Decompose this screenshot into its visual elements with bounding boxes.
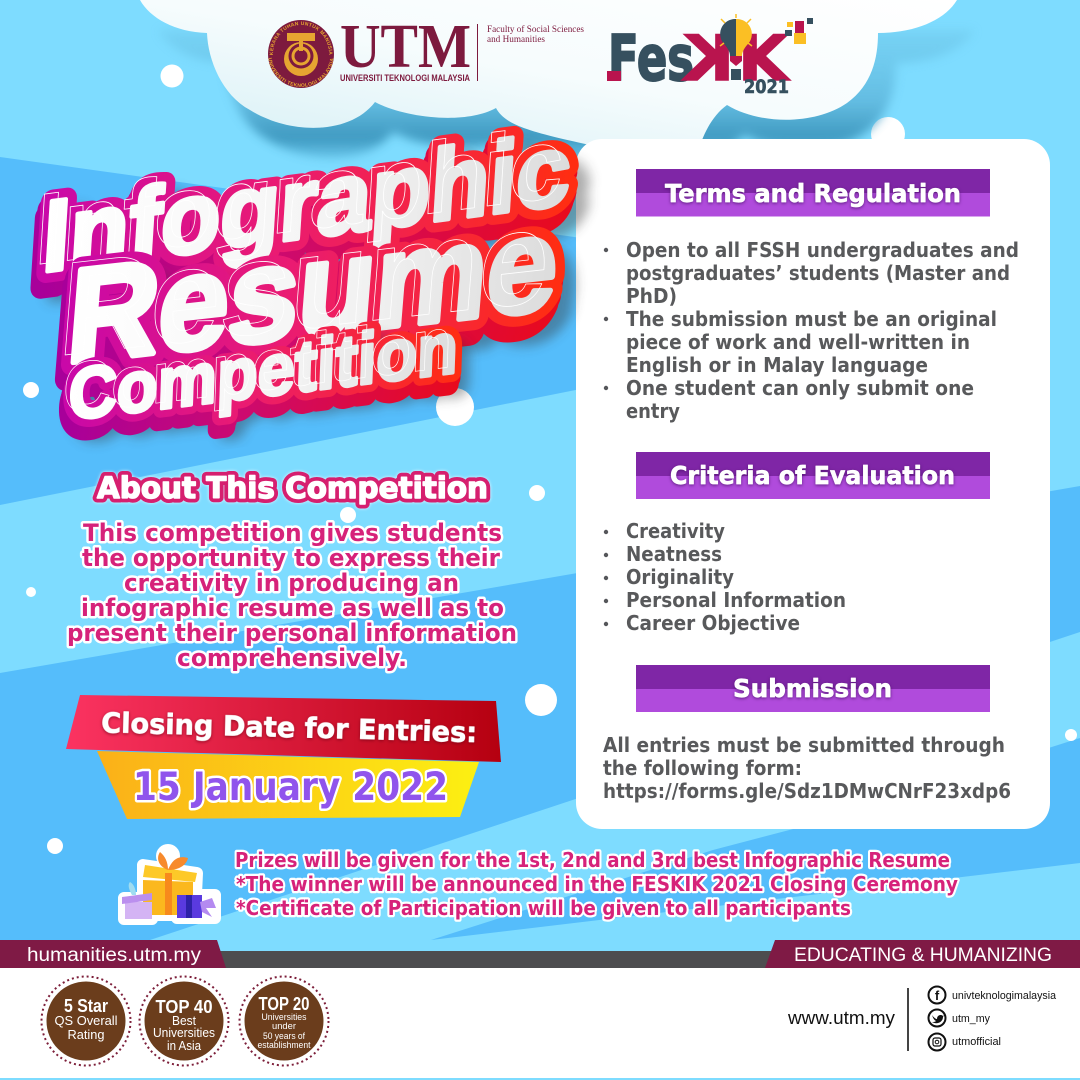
text block: submission: the following form: <box>603 756 802 780</box>
title line: Competition: Competition <box>67 307 459 436</box>
list: terms <box>604 238 1019 423</box>
list: terms: The submission must be an original <box>626 307 997 331</box>
text block: about the competition: infographic resume as well as to <box>81 594 504 622</box>
badge: 5 Star <box>42 976 130 1066</box>
faculty name: Faculty of Social Sciences <box>487 24 584 35</box>
title line: Resume: Resume <box>63 187 564 392</box>
list: terms: PhD) <box>626 284 677 308</box>
list: terms: piece of work and well-written in <box>626 330 970 354</box>
text block: about the competition: comprehensively. <box>177 644 407 672</box>
list: criteria: Originality <box>626 565 734 589</box>
badge: Top 40: Best <box>172 1014 197 1028</box>
text block: about the competition: the opportunity to express their <box>82 544 500 572</box>
list: criteria: Creativity <box>626 519 725 543</box>
heading: About This Competition: About This Competition <box>97 471 488 505</box>
list: terms: Open to all FSSH undergraduates and <box>626 238 1019 262</box>
title line: Resume: Resume <box>54 180 555 385</box>
title line: Competition: Competition <box>62 302 454 431</box>
icon: gift boxes <box>122 850 216 919</box>
social: facebook: f <box>935 988 940 1003</box>
text block: submission: https://forms.gle/Sdz1DMwCNrF23xdp6 <box>603 779 1011 803</box>
cloud <box>140 0 957 145</box>
closing date value: 15 January 2022 <box>133 765 448 810</box>
list: terms: postgraduates’ students (Master and <box>626 261 1010 285</box>
social: facebook: univteknologimalaysia <box>952 990 1057 1002</box>
footer tab: motto <box>765 940 1080 968</box>
badge: Top 40: in Asia <box>167 1039 201 1053</box>
title line: Infographic: Infographic <box>35 128 569 309</box>
badge: Top 40: Universities <box>153 1026 215 1040</box>
title line: Resume: Resume <box>73 206 574 411</box>
title line: Infographic: Infographic <box>40 113 574 294</box>
heading: Submission: Submission <box>733 674 892 703</box>
FesKIK logo: Fes <box>608 22 694 95</box>
text block: prizes: Prizes will be given for the 1st, 2nd and 3rd best Infographic Resume <box>235 848 950 872</box>
social: instagram: utmofficial <box>952 1036 1001 1048</box>
title: Infographic Resume Competition <box>30 103 587 453</box>
title line: Infographic: Infographic <box>40 113 574 294</box>
icon: UTM seal: KERANA TUHAN UNTUK MANUSIA <box>270 22 332 55</box>
title line: Competition: Competition <box>64 319 456 449</box>
badge: 5 Star: 5 Star <box>64 996 108 1016</box>
badge: Top 20 <box>240 976 328 1066</box>
FesKIK logo: K <box>738 22 790 95</box>
list: criteria: Personal Information <box>626 588 846 612</box>
list: criteria: Career Objective <box>626 611 800 635</box>
UTM wordmark: UTM <box>340 13 471 81</box>
footer tab: website: humanities.utm.my <box>27 945 202 966</box>
closing date banner <box>66 695 501 819</box>
university name: UNIVERSITI TEKNOLOGI MALAYSIA <box>340 73 470 83</box>
title line: Competition: Competition <box>67 307 459 436</box>
badge: Top 20: Universities <box>262 1012 307 1023</box>
title line: Infographic: Infographic <box>50 132 585 313</box>
text block: submission <box>603 733 1011 803</box>
FesKIK logo: K <box>682 22 734 95</box>
FesKIK logo <box>607 14 813 98</box>
faculty name <box>487 24 584 45</box>
title line: Resume: Resume <box>63 187 564 392</box>
title line: Competition: Competition <box>75 322 467 451</box>
heading: Terms and Regulation <box>636 169 990 216</box>
footer <box>0 940 1080 1078</box>
badge: Top 20: establishment <box>258 1040 311 1051</box>
footer tab: motto: EDUCATING & HUMANIZING <box>794 945 1052 966</box>
heading: Criteria of Evaluation <box>636 452 990 499</box>
title line: Resume: Resume <box>60 195 561 400</box>
social: twitter: utm_my <box>952 1013 990 1025</box>
title line: Competition: Competition <box>66 313 458 442</box>
heading: Terms and Regulation: Terms and Regulation <box>665 179 961 208</box>
UTM logo <box>268 13 584 88</box>
list: terms: entry <box>626 399 680 423</box>
badge: Top 40 <box>140 976 228 1066</box>
list: criteria <box>604 519 846 635</box>
faculty name: and Humanities <box>487 35 545 45</box>
text block: prizes: *Certificate of Participation will be given to all participants <box>236 896 851 920</box>
FesKIK logo: 2021 <box>744 76 789 98</box>
cloud shadow <box>158 30 975 175</box>
list: criteria: Neatness <box>626 542 722 566</box>
title line: Infographic: Infographic <box>37 120 572 302</box>
text block: about the competition: This competition gives students <box>83 519 502 547</box>
website address: www.utm.my <box>787 1008 895 1028</box>
badge: Top 20: TOP 20 <box>258 994 310 1014</box>
text block: about the competition <box>67 519 517 672</box>
social: twitter <box>928 1010 990 1026</box>
icon: pixel squares <box>785 18 813 44</box>
icon: UTM seal: UNIVERSITI TEKNOLOGI MALAYSIA <box>268 58 334 87</box>
heading: About This Competition: About This Competition <box>97 471 488 505</box>
text block: prizes: *The winner will be announced in the FESKIK 2021 Closing Ceremony <box>236 872 958 896</box>
footer tab: website <box>0 940 226 968</box>
title line: Infographic: Infographic <box>32 106 567 287</box>
closing date label: Closing Date for Entries: <box>101 706 478 749</box>
heading: Criteria of Evaluation: Criteria of Evaluation <box>670 461 955 490</box>
text block: submission: All entries must be submitted through <box>603 733 1005 757</box>
badge: Top 20: 50 years of <box>263 1031 305 1042</box>
text block: about the competition: creativity in producing an <box>124 569 459 597</box>
list: terms: English or in Malay language <box>626 353 928 377</box>
heading: Submission <box>636 665 990 712</box>
icon: UTM seal <box>268 20 334 88</box>
panel: details card <box>576 139 1050 829</box>
badge: 5 Star: QS Overall <box>54 1013 118 1028</box>
title line: Resume: Resume <box>58 202 559 407</box>
list: terms: One student can only submit one <box>626 376 974 400</box>
badge: Top 20: under <box>272 1021 296 1032</box>
badge: 5 Star: Rating <box>68 1027 104 1042</box>
text block: about the competition: present their personal information <box>67 619 517 647</box>
social: instagram <box>928 1034 1001 1050</box>
icon: light bulb <box>720 14 752 80</box>
text block: prizes <box>235 848 958 920</box>
badge: Top 40: TOP 40 <box>156 997 212 1017</box>
social: facebook <box>928 986 1057 1004</box>
